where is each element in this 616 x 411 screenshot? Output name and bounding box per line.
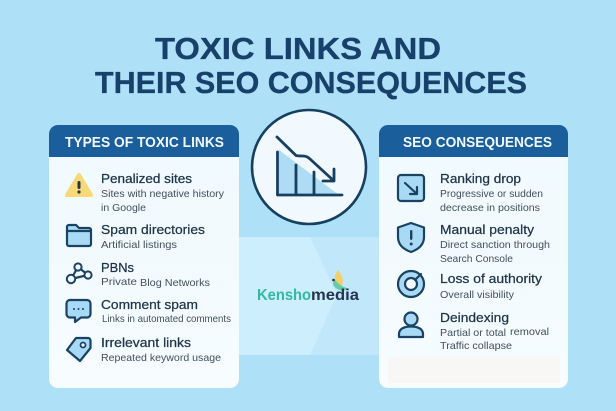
icon: target [398, 271, 424, 297]
panel header [379, 125, 568, 157]
centre background band [235, 237, 385, 355]
item: comment spam [66, 298, 231, 325]
logo: Kenshomedia [257, 270, 359, 304]
item: PBNs: Private [101, 277, 137, 288]
empty beige block [388, 357, 560, 383]
icon: warning triangle [67, 175, 91, 195]
item: comment spam: Comment spam [101, 298, 198, 312]
item: spam directories: Artificial listings [101, 240, 177, 251]
title: THEIR SEO CONSEQUENCES [95, 65, 527, 100]
panel header [49, 125, 239, 157]
item: spam directories: Spam directories [101, 223, 205, 237]
title [95, 31, 527, 100]
icon: declining chart in circle [252, 110, 366, 224]
icon: tag [67, 338, 90, 361]
item: deindexing [399, 311, 549, 352]
item: deindexing: Deindexing [440, 311, 509, 325]
item: PBNs [67, 261, 210, 289]
item: loss of authority [398, 271, 543, 301]
panel header: SEO CONSEQUENCES [403, 135, 552, 151]
icon: speech bubble [66, 300, 90, 322]
icon: network nodes [67, 263, 92, 283]
panel header: TYPES OF TOXIC LINKS [65, 135, 224, 151]
item: penalized sites: in Google [101, 203, 146, 214]
title: TOXIC LINKS AND [155, 31, 441, 66]
item: manual penalty [398, 223, 550, 265]
logo: Kenshomedia: media [311, 287, 359, 304]
logo: Kenshomedia: Kensho [257, 287, 311, 304]
item: deindexing: Traffic collapse [440, 341, 512, 352]
icon: bird [332, 270, 350, 290]
item: loss of authority: Loss of authority [440, 272, 543, 286]
panel: SEO consequences [379, 125, 568, 388]
item: penalized sites [67, 172, 225, 214]
icon: falling arrow square [398, 175, 424, 201]
item: comment spam: Links in automated comments [102, 314, 231, 325]
icon: shield [398, 223, 424, 252]
item: spam directories [67, 223, 205, 251]
item: manual penalty: Manual penalty [440, 223, 535, 237]
item: ranking drop: Progressive or sudden [440, 189, 543, 200]
item: penalized sites: Sites with negative history [101, 189, 225, 200]
background arrow shape [235, 237, 337, 355]
item: ranking drop [398, 172, 543, 214]
item: manual penalty: Direct sanction through [440, 240, 550, 251]
item: manual penalty: Search Console [440, 254, 513, 265]
item: loss of authority: Overall visibility [440, 290, 515, 301]
item: PBNs: Blog Networks [140, 278, 210, 289]
icon: person [399, 312, 423, 337]
icon: folder [67, 225, 91, 246]
item: deindexing: removal [510, 327, 549, 338]
item: irrelevant links [67, 336, 221, 364]
item: PBNs: PBNs [101, 261, 134, 275]
item: ranking drop: Ranking drop [440, 172, 521, 186]
panel: types of toxic links [49, 125, 239, 388]
item: penalized sites: Penalized sites [101, 172, 192, 186]
item: irrelevant links: Repeated keyword usage [101, 353, 221, 364]
item: irrelevant links: Irrelevant links [101, 336, 191, 350]
item: ranking drop: decrease in positions [440, 203, 540, 214]
item: deindexing: Partial or total [440, 328, 506, 339]
